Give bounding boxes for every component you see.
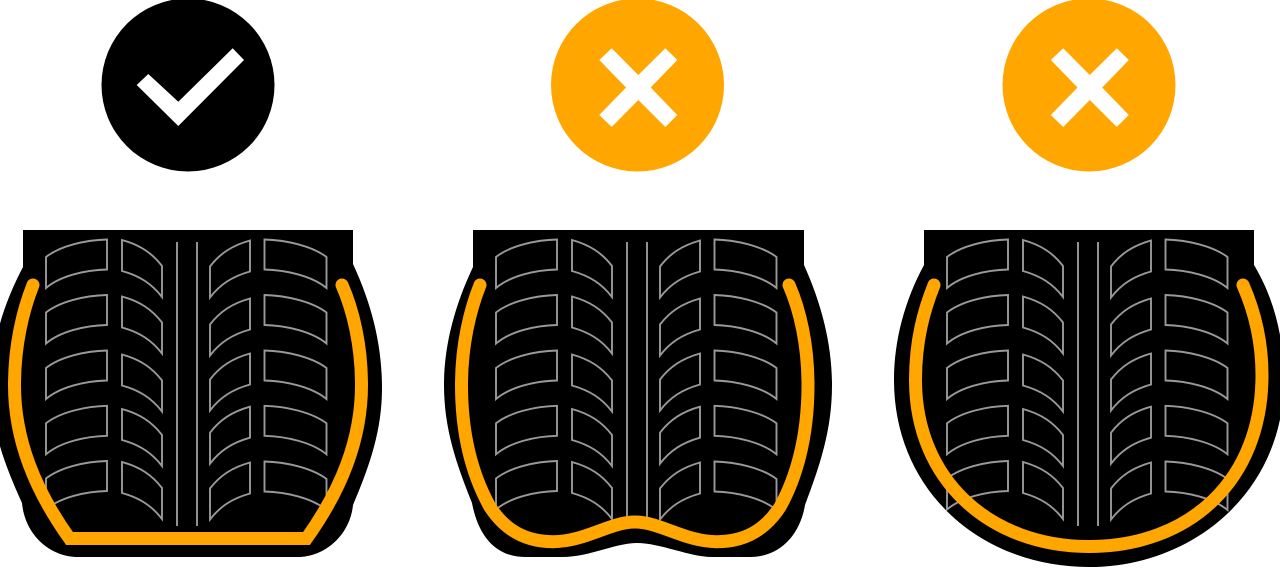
icon: orange cross badge, right	[1002, 0, 1176, 172]
tyre: correct pressure, flat contact	[0, 230, 382, 557]
icon: orange cross badge, centre	[551, 0, 724, 172]
tyre: over-inflated, rounded contact	[894, 230, 1280, 567]
tyre: under-inflated, sagging centre	[444, 230, 832, 557]
icon: black check mark badge	[102, 0, 274, 172]
